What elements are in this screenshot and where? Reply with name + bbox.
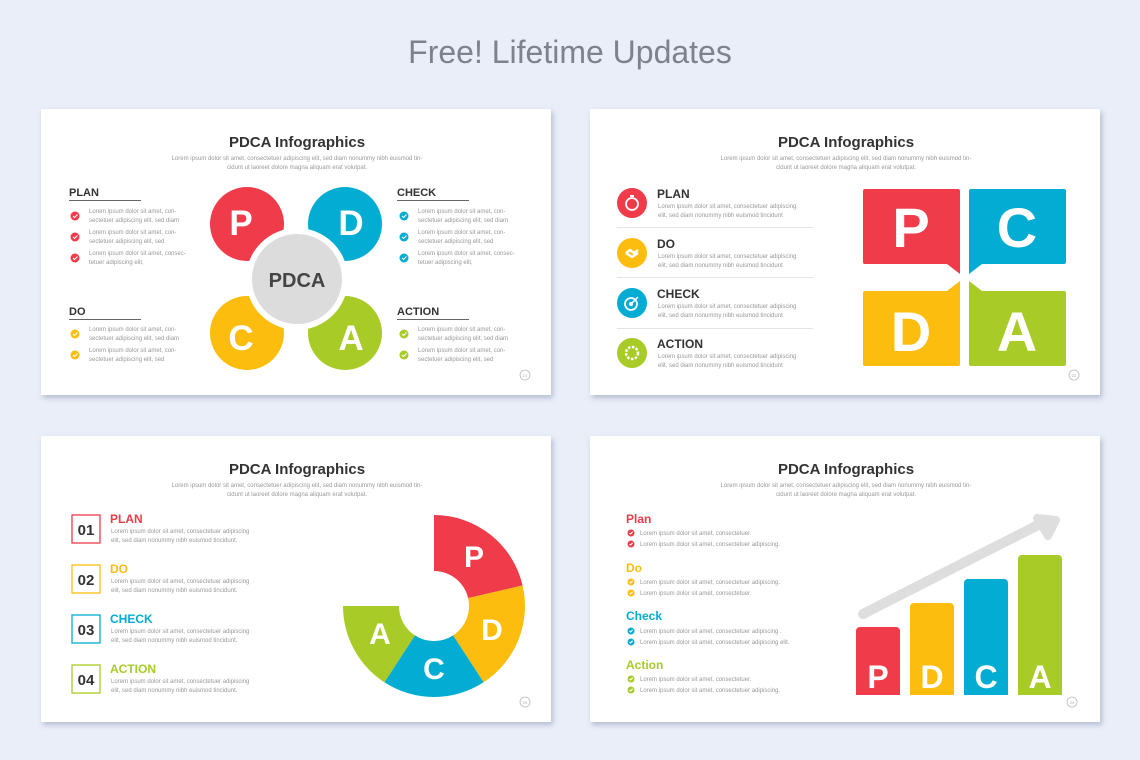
- list with icons: elit, sed diam nonummy nibh euismod tincidunt: [658, 213, 783, 219]
- panel: card 23 donut: cidunt ut laoreet dolore magna aliquam erat volutpat.: [227, 492, 367, 498]
- panel: card 21 petals: Lorem ipsum dolor sit amet, consectetuer adipiscing elit, sed diam nonummy nibh euismod tin-: [172, 156, 422, 162]
- do list: [69, 306, 179, 363]
- check list: CHECK: [397, 187, 436, 199]
- list with icons: elit, sed diam nonummy nibh euismod tincidunt: [658, 313, 783, 319]
- numbered list: PLAN: [110, 512, 143, 526]
- bullet list: Lorem ipsum dolor sit amet, consectetuer adipiscing.: [640, 542, 780, 548]
- check list: tetuer adipiscing elit,: [418, 260, 473, 266]
- check list: [397, 187, 515, 266]
- donut chart: D: [481, 614, 503, 647]
- panel: card 22 speech boxes: 22: [1072, 373, 1077, 378]
- PCDA boxes: A: [997, 300, 1037, 363]
- list with icons: Lorem ipsum dolor sit amet, consectetuer adipiscing: [658, 304, 796, 310]
- plan list: sectetuer adipiscing elit, sed: [89, 239, 164, 245]
- plan list: sectetuer adipiscing elit, sed diam: [89, 218, 179, 224]
- bullet list: Plan: [626, 512, 651, 526]
- PCDA boxes: C: [997, 196, 1037, 259]
- panel: card 22 speech boxes: [590, 109, 1100, 395]
- numbered list: Lorem ipsum dolor sit amet, consectetuer adipiscing: [111, 529, 249, 535]
- check list: Lorem ipsum dolor sit amet, con-: [418, 209, 505, 215]
- panel: card 24 bar chart: PDCA Infographics: [778, 461, 914, 478]
- plan list: [69, 187, 186, 266]
- numbered list: elit, sed diam nonummy nibh euismod tincidunt.: [111, 638, 238, 644]
- list with icons: CHECK: [657, 287, 700, 301]
- plan list: Lorem ipsum dolor sit amet, con-: [89, 230, 176, 236]
- panel: card 22 speech boxes: PDCA Infographics: [778, 134, 914, 151]
- numbered list: Lorem ipsum dolor sit amet, consectetuer adipiscing: [111, 679, 249, 685]
- do list: sectetuer adipiscing elit, sed: [89, 357, 164, 363]
- list with icons: elit, sed diam nonummy nibh euismod tincidunt: [658, 263, 783, 269]
- numbered list: [72, 512, 249, 694]
- petal diagram: PDCA: [269, 270, 325, 292]
- bullet list: Lorem ipsum dolor sit amet, consectetuer.: [640, 531, 752, 537]
- arrow: [863, 518, 1056, 614]
- numbered list: 03: [78, 622, 94, 639]
- plan list: tetuer adipiscing elit,: [89, 260, 144, 266]
- panel: card 24 bar chart: Lorem ipsum dolor sit amet, consectetuer adipiscing elit, sed diam nonummy nibh euismod tin-: [721, 483, 971, 489]
- numbered list: 02: [78, 572, 94, 589]
- list with icons: Lorem ipsum dolor sit amet, consectetuer adipiscing: [658, 254, 796, 260]
- bars: [856, 555, 1062, 695]
- petal diagram: D: [338, 204, 364, 243]
- panel: card 24 bar chart: [590, 436, 1100, 722]
- panel: card 21 petals: PDCA Infographics: [229, 134, 365, 151]
- action list: sectetuer adipiscing elit, sed: [418, 357, 493, 363]
- plan list: PLAN: [69, 187, 99, 199]
- panel: card 23 donut: 23: [523, 700, 528, 705]
- bars: D: [920, 659, 944, 695]
- list with icons: [617, 187, 813, 369]
- panel: card 22 speech boxes: Lorem ipsum dolor sit amet, consectetuer adipiscing elit, sed diam nonummy nibh euismod tin-: [721, 156, 971, 162]
- do list: sectetuer adipiscing elit, sed diam: [89, 336, 179, 342]
- check list: Lorem ipsum dolor sit amet, con-: [418, 230, 505, 236]
- bullet list: Lorem ipsum dolor sit amet, consectetuer adipiscing.: [640, 688, 780, 694]
- check list: sectetuer adipiscing elit, sed diam: [418, 218, 508, 224]
- PCDA boxes: P: [892, 196, 930, 259]
- do list: Lorem ipsum dolor sit amet, con-: [89, 348, 176, 354]
- panel: card 23 donut: PDCA Infographics: [229, 461, 365, 478]
- plan list: Lorem ipsum dolor sit amet, con-: [89, 209, 176, 215]
- donut chart: P: [464, 541, 484, 574]
- donut chart: [343, 515, 525, 697]
- PCDA boxes: [863, 189, 1066, 366]
- list with icons: elit, sed diam nonummy nibh euismod tincidunt: [658, 363, 783, 369]
- bullet list: Do: [626, 561, 642, 575]
- numbered list: elit, sed diam nonummy nibh euismod tincidunt.: [111, 538, 238, 544]
- bullet list: [626, 512, 790, 694]
- donut chart: A: [369, 618, 391, 651]
- action list: Lorem ipsum dolor sit amet, con-: [418, 327, 505, 333]
- panel: card 21 petals: cidunt ut laoreet dolore magna aliquam erat volutpat.: [227, 165, 367, 171]
- panel: card 23 donut: [41, 436, 551, 722]
- panel: card 24 bar chart: cidunt ut laoreet dolore magna aliquam erat volutpat.: [776, 492, 916, 498]
- panel: card 23 donut: Lorem ipsum dolor sit amet, consectetuer adipiscing elit, sed diam nonummy nibh euismod tin-: [172, 483, 422, 489]
- bars: P: [867, 659, 889, 695]
- plan list: Lorem ipsum dolor sit amet, consec-: [89, 251, 186, 257]
- numbered list: elit, sed diam nonummy nibh euismod tincidunt.: [111, 688, 238, 694]
- list with icons: ACTION: [657, 337, 703, 351]
- petal diagram: C: [228, 319, 254, 358]
- action list: ACTION: [397, 306, 439, 318]
- panel: card 22 speech boxes: cidunt ut laoreet dolore magna aliquam erat volutpat.: [776, 165, 916, 171]
- panel: card 21 petals: 21: [523, 373, 528, 378]
- numbered list: 01: [78, 522, 94, 539]
- bullet list: Action: [626, 658, 663, 672]
- donut chart: C: [423, 653, 445, 686]
- action list: Lorem ipsum dolor sit amet, con-: [418, 348, 505, 354]
- panel: card 21 petals: [41, 109, 551, 395]
- bars: A: [1028, 659, 1052, 695]
- bullet list: Check: [626, 609, 662, 623]
- action list: [397, 306, 508, 363]
- list with icons: PLAN: [657, 187, 690, 201]
- panel: card 24 bar chart: 24: [1070, 700, 1075, 705]
- do list: Lorem ipsum dolor sit amet, con-: [89, 327, 176, 333]
- numbered list: 04: [78, 672, 95, 689]
- list with icons: DO: [657, 237, 675, 251]
- numbered list: elit, sed diam nonummy nibh euismod tincidunt.: [111, 588, 238, 594]
- do list: DO: [69, 306, 86, 318]
- bullet list: Lorem ipsum dolor sit amet, consectetuer adipiscing elit.: [640, 640, 790, 646]
- bars: C: [974, 659, 998, 695]
- numbered list: CHECK: [110, 612, 153, 626]
- action list: sectetuer adipiscing elit, sed diam: [418, 336, 508, 342]
- numbered list: Lorem ipsum dolor sit amet, consectetuer adipiscing: [111, 629, 249, 635]
- list with icons: Lorem ipsum dolor sit amet, consectetuer adipiscing: [658, 204, 796, 210]
- bullet list: Lorem ipsum dolor sit amet, consectetuer adipiscing.: [640, 580, 780, 586]
- petal diagram: [210, 187, 382, 370]
- title: Free! Lifetime Updates: [408, 34, 732, 70]
- PCDA boxes: D: [891, 300, 931, 363]
- list with icons: Lorem ipsum dolor sit amet, consectetuer adipiscing: [658, 354, 796, 360]
- bullet list: Lorem ipsum dolor sit amet, consectetuer.: [640, 591, 752, 597]
- numbered list: ACTION: [110, 662, 156, 676]
- numbered list: DO: [110, 562, 128, 576]
- check list: Lorem ipsum dolor sit amet, consec-: [418, 251, 515, 257]
- bullet list: Lorem ipsum dolor sit amet, consectetuer adipiscing .: [640, 629, 782, 635]
- numbered list: Lorem ipsum dolor sit amet, consectetuer adipiscing: [111, 579, 249, 585]
- bullet list: Lorem ipsum dolor sit amet, consectetuer.: [640, 677, 752, 683]
- petal diagram: A: [338, 319, 364, 358]
- check list: sectetuer adipiscing elit, sed: [418, 239, 493, 245]
- petal diagram: P: [229, 204, 253, 243]
